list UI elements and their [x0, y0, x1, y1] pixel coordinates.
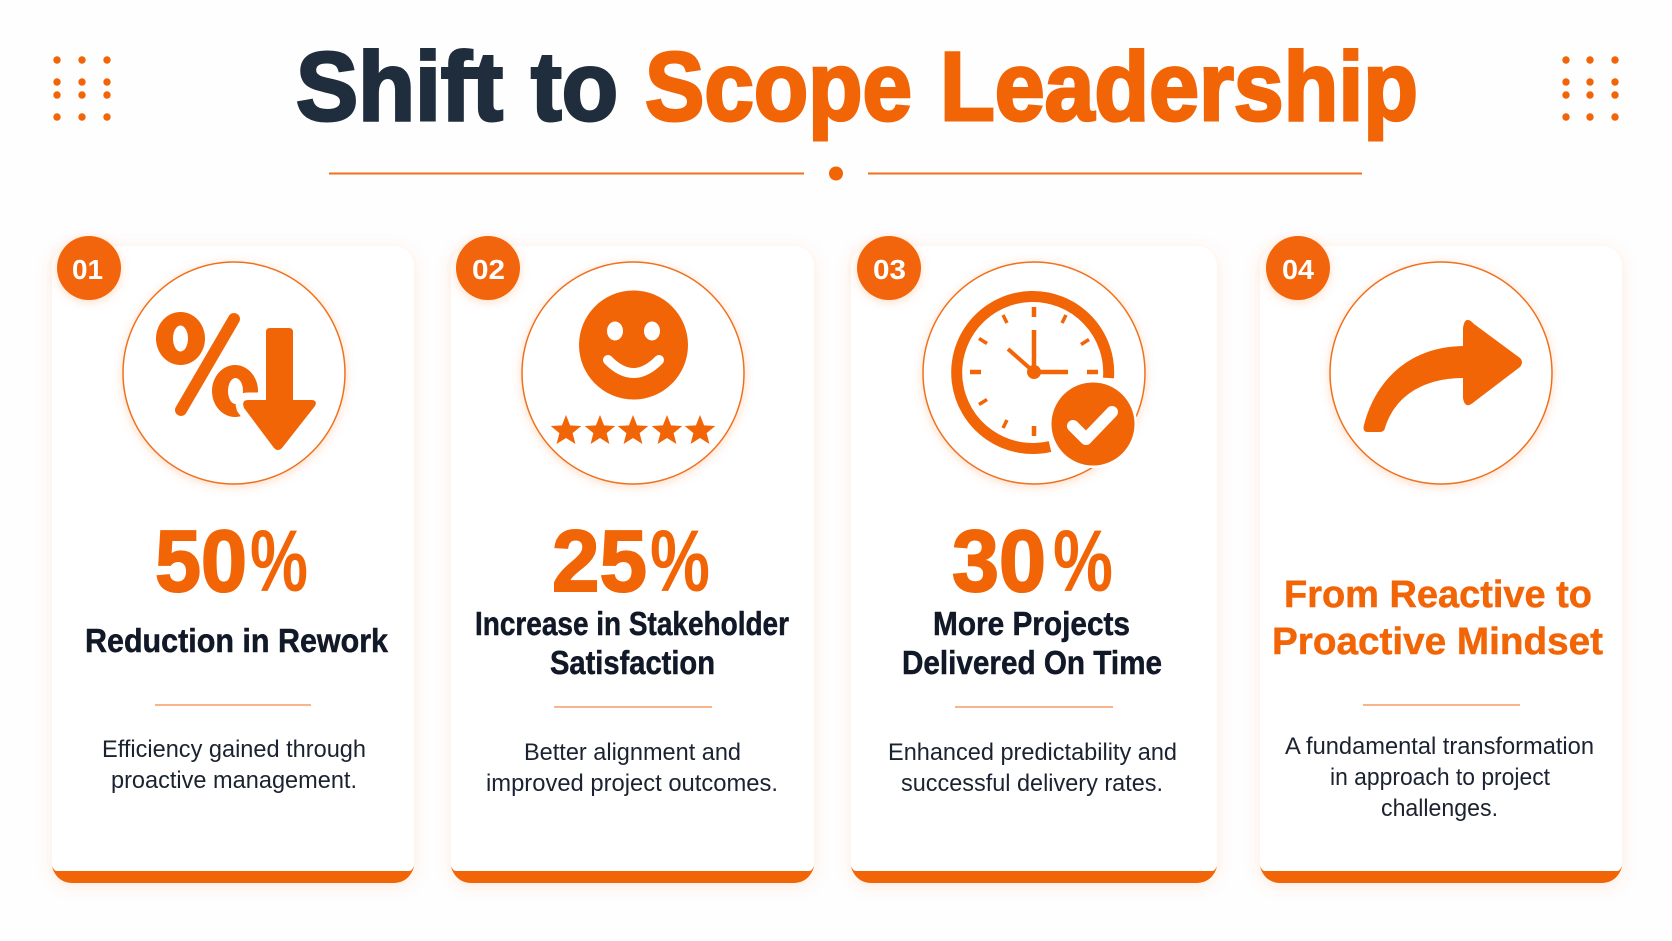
- icon ring: [923, 262, 1145, 484]
- card bottom bar: [52, 866, 414, 883]
- description: successful delivery rates.: [901, 770, 1163, 797]
- title: Scope: [645, 32, 912, 141]
- icon: percent with down arrow: [156, 312, 316, 450]
- description: in approach to project: [1330, 764, 1550, 791]
- title: Shift: [296, 32, 503, 141]
- title: [296, 32, 1418, 141]
- stat 30%: [952, 513, 1113, 610]
- label: Delivered On Time: [902, 644, 1162, 681]
- decorative dots left: [53, 56, 111, 121]
- badge 04: 04: [1282, 254, 1314, 285]
- icon: curved arrow: [1364, 320, 1522, 432]
- label: Increase in Stakeholder: [475, 605, 789, 642]
- stat 30%: %: [1053, 513, 1113, 610]
- description: Enhanced predictability and: [888, 739, 1177, 766]
- card background: [851, 246, 1217, 883]
- badge 02: [456, 236, 520, 300]
- stat 50%: [155, 513, 308, 610]
- title divider: [329, 166, 1362, 180]
- stat 25%: 25: [552, 513, 647, 610]
- card bottom bar: [1260, 866, 1622, 883]
- card bottom bar: [451, 866, 814, 883]
- description: improved project outcomes.: [486, 770, 778, 797]
- label: [902, 605, 1162, 681]
- title: to: [531, 32, 618, 141]
- description: Better alignment and: [524, 739, 741, 766]
- heading: [1272, 574, 1603, 663]
- decorative dots right: [1562, 56, 1619, 121]
- description: Efficiency gained through: [102, 736, 366, 763]
- heading: From Reactive to: [1284, 574, 1592, 616]
- badge 03: 03: [873, 254, 906, 285]
- badge 01: 01: [72, 254, 103, 285]
- stat 25%: [552, 513, 710, 610]
- icon ring: [522, 262, 744, 484]
- description: A fundamental transformation: [1285, 733, 1594, 760]
- stat 30%: 30: [952, 513, 1046, 610]
- badge 02: 02: [472, 254, 505, 285]
- stat 25%: %: [650, 513, 710, 610]
- card bottom bar: [851, 866, 1217, 883]
- stat 50%: 50: [155, 513, 247, 610]
- panel: card 2: [451, 236, 814, 883]
- description: [1285, 733, 1594, 822]
- description: [888, 739, 1177, 797]
- card background: [451, 246, 814, 883]
- label: Satisfaction: [550, 644, 715, 681]
- badge 01: [57, 236, 121, 300]
- panel: card 1: [52, 236, 414, 883]
- label: More Projects: [933, 605, 1130, 642]
- panel: card 3: [851, 236, 1217, 883]
- stat 50%: %: [250, 513, 308, 610]
- icon ring: [1330, 262, 1552, 484]
- badge 03: [857, 236, 921, 300]
- label: Reduction in Rework: [85, 622, 389, 659]
- label: [475, 605, 789, 681]
- description: proactive management.: [111, 767, 357, 794]
- card background: [52, 246, 414, 883]
- badge 04: [1266, 236, 1330, 300]
- description: challenges.: [1381, 795, 1498, 822]
- icon ring: [123, 262, 345, 484]
- card background: [1260, 246, 1622, 883]
- title: Leadership: [940, 32, 1418, 141]
- description: [102, 736, 366, 794]
- icon: smiley with stars: [551, 290, 715, 444]
- icon: clock with check: [957, 296, 1134, 466]
- panel: card 4: [1260, 236, 1622, 883]
- heading: Proactive Mindset: [1272, 621, 1603, 663]
- description: [486, 739, 778, 797]
